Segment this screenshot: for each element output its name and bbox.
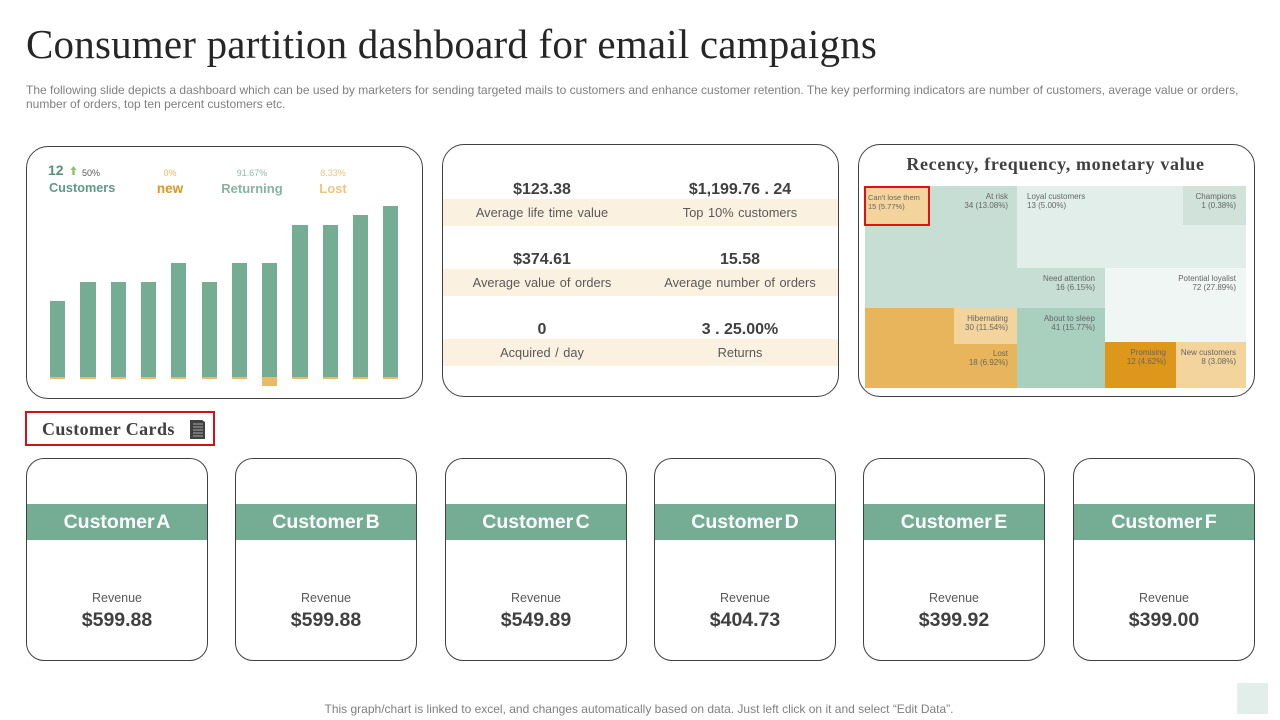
treemap chart <box>865 186 1246 388</box>
new metric: new <box>157 181 183 196</box>
card: customer D <box>654 458 836 661</box>
returning metric: 91.67% <box>237 168 267 178</box>
returning metric: Returning <box>221 181 283 196</box>
card: customer C <box>445 458 627 661</box>
segment: can't lose them: 15 (5.77%) <box>868 202 905 211</box>
lost metric: Lost <box>319 181 347 196</box>
card: customer C: Revenue <box>511 591 561 605</box>
metric: returns <box>702 321 778 360</box>
metric: acquired per day: 0 <box>538 321 546 338</box>
metric: acquired per day <box>443 321 838 366</box>
card: customer F: Customer F <box>1111 511 1217 533</box>
card: customer D: Customer D <box>691 511 799 533</box>
segment: champions <box>1183 186 1246 225</box>
segment: new customers <box>1176 342 1246 388</box>
card: customer A <box>26 458 208 661</box>
returning metric <box>221 168 283 196</box>
new metric <box>157 168 184 196</box>
lost metric: 8.33% <box>320 168 346 178</box>
metric: top 10% customers <box>683 181 797 220</box>
metric: average life time value: $123.38 <box>513 181 571 198</box>
segment: promising: Promising <box>1130 348 1166 357</box>
card: customer B: Customer B <box>272 511 380 533</box>
panel: key metrics <box>442 144 839 397</box>
metric: average life time value: Average life time value <box>476 205 608 220</box>
metric: top 10% customers: Top 10% customers <box>683 205 797 220</box>
metric: average life time value <box>443 181 838 226</box>
metric: returns: 3 . 25.00% <box>702 321 778 338</box>
segment: can't lose them: Can't lose them <box>868 193 920 202</box>
segment: about to sleep: 41 (15.77%) <box>1051 323 1095 332</box>
segment: potential loyalist <box>1105 268 1246 342</box>
segment: hibernating: 30 (11.54%) <box>965 323 1008 332</box>
segment: hibernating: Hibernating <box>967 314 1008 323</box>
new metric: 0% <box>163 168 176 178</box>
description text <box>26 83 1238 111</box>
card: customer F <box>1073 458 1255 661</box>
segment: about to sleep: About to sleep <box>1044 314 1095 323</box>
segment: lost: Lost <box>993 349 1008 358</box>
customer cards heading <box>25 411 215 446</box>
metric: average number of orders: Average number of orders <box>664 275 816 290</box>
metric: average number of orders: 15.58 <box>720 251 760 268</box>
card: customer B <box>235 458 417 661</box>
segment: can't lose them <box>864 186 930 226</box>
metric: top 10% customers: $1,199.76 . 24 <box>689 181 791 198</box>
metric: returns: Returns <box>718 345 762 360</box>
metric: average value of orders: $374.61 <box>513 251 571 268</box>
segment: lost: 18 (6.92%) <box>969 358 1008 367</box>
page number box <box>1237 683 1268 714</box>
segment: at risk: 34 (13.08%) <box>964 201 1008 210</box>
segment: loyal customers: 13 (5.00%) <box>1027 201 1066 210</box>
card: customer B: $599.88 <box>291 609 361 631</box>
card: customer A: Revenue <box>92 591 142 605</box>
segment: new customers: 8 (3.08%) <box>1201 357 1236 366</box>
segment: need attention: Need attention <box>1043 274 1095 283</box>
segment: new customers: New customers <box>1181 348 1236 357</box>
segment: promising: 12 (4.62%) <box>1127 357 1166 366</box>
description text: number of orders, top ten percent customers etc. <box>26 97 285 111</box>
heading text: Customer Cards <box>42 419 175 439</box>
segment: hibernating <box>954 308 1017 344</box>
segment: potential loyalist: Potential loyalist <box>1178 274 1236 283</box>
card: customer C: $549.89 <box>501 609 571 631</box>
bar chart <box>50 206 398 386</box>
icon: up arrow <box>70 166 76 175</box>
card: customer E <box>863 458 1045 661</box>
segment: champions: 1 (0.38%) <box>1201 201 1236 210</box>
card: customer A: $599.88 <box>82 609 152 631</box>
customers label: Customers <box>49 181 115 195</box>
card: customer C: Customer C <box>482 511 590 533</box>
segment: champions: Champions <box>1196 192 1236 201</box>
card: customer D: $404.73 <box>710 609 780 631</box>
segment: potential loyalist: 72 (27.89%) <box>1192 283 1236 292</box>
segment: at risk: At risk <box>986 192 1008 201</box>
segment: about to sleep <box>1017 308 1105 388</box>
metric: average number of orders <box>664 251 816 290</box>
card: customer B: Revenue <box>301 591 351 605</box>
card: customer F: $399.00 <box>1129 609 1199 631</box>
description text: The following slide depicts a dashboard which can be used by marketers for sending targeted mails to customers and enhance customer retention. The key performing indicators are number of customers, average value or orders, <box>26 83 1238 97</box>
metric: acquired per day: Acquired / day <box>500 345 584 360</box>
segment: lost <box>865 308 1017 388</box>
customers change: 50% <box>82 168 100 178</box>
panel: customers chart <box>26 146 423 399</box>
treemap heading: Recency, frequency, monetary value <box>906 154 1205 174</box>
segment: loyal customers: Loyal customers <box>1027 192 1085 201</box>
metric: average value of orders <box>443 251 838 296</box>
lost metric <box>319 168 347 196</box>
segment: need attention <box>1017 268 1105 308</box>
card: customer A: Customer A <box>64 511 170 533</box>
segment: promising <box>1105 342 1176 388</box>
metric: average value of orders: Average value of orders <box>473 275 611 290</box>
icon: document stack <box>190 420 205 439</box>
card: customer E: $399.92 <box>919 609 989 631</box>
panel: RFM treemap <box>858 144 1255 397</box>
customers count: 12 <box>48 162 64 178</box>
footnote: This graph/chart is linked to excel, and changes automatically based on data. Just left click on it and select “Edit Data”. <box>324 702 954 716</box>
card: customer F: Revenue <box>1139 591 1189 605</box>
title: Consumer partition dashboard for email campaigns <box>26 21 877 67</box>
segment: need attention: 16 (6.15%) <box>1056 283 1095 292</box>
card: customer E: Customer E <box>901 511 1007 533</box>
segment: at risk <box>865 186 1017 308</box>
card: customer D: Revenue <box>720 591 770 605</box>
card: customer E: Revenue <box>929 591 979 605</box>
segment: loyal customers <box>1017 186 1246 268</box>
